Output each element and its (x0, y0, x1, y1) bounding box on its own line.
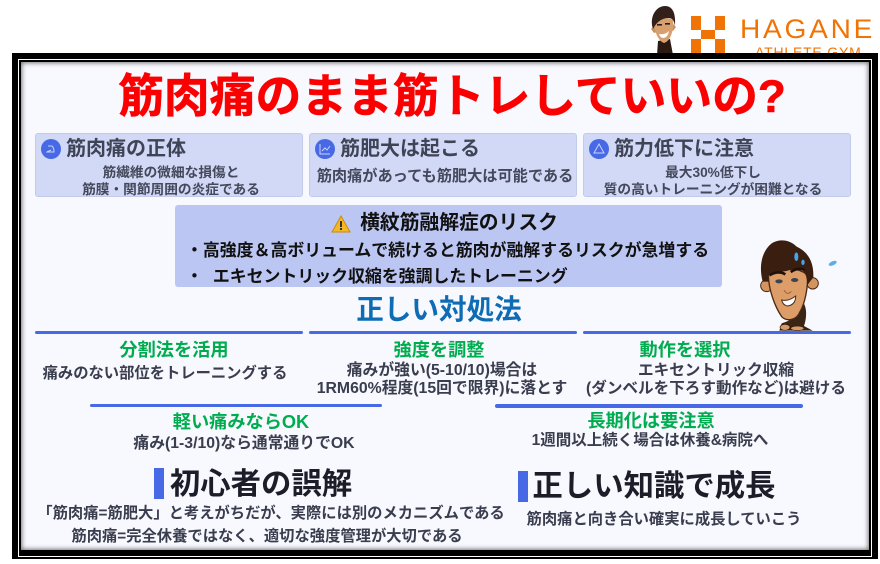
text: 1RM60%程度(15回で限界)に落とす (317, 380, 567, 397)
accent bar (518, 471, 528, 502)
heading: 正しい知識で成長 (532, 469, 776, 503)
section heading: 正しい対処法 (356, 294, 522, 325)
heading: 筋力低下に注意 (614, 138, 754, 160)
panel: 筋肉痛の正体 (35, 133, 303, 197)
text: 最大30%低下し (665, 165, 761, 180)
mascot (760, 240, 837, 331)
icon: mascot small (651, 6, 676, 53)
text (586, 362, 846, 397)
icon: chart (315, 139, 335, 159)
heading: 長期化は要注意 (587, 411, 715, 431)
text: 筋膜・関節周囲の炎症である (82, 182, 260, 197)
heading: 動作を選択 (640, 340, 730, 360)
panel: 強度 (309, 331, 577, 397)
text: 痛みのない部位をトレーニングする (43, 365, 287, 382)
heading: 筋肉痛の正体 (66, 138, 186, 160)
title: 筋肉痛のまま筋トレしていいの? (118, 71, 786, 122)
heading: 軽い痛みならOK (173, 412, 309, 432)
text (82, 165, 260, 197)
panel: 筋力低下に注意 (583, 133, 851, 197)
text: 筋繊維の微細な損傷と (103, 165, 239, 180)
text: 質の高いトレーニングが困難となる (604, 182, 822, 197)
text: 1週間以上続く場合は休養&病院へ (532, 432, 768, 449)
logo name: HAGANE (740, 14, 875, 44)
risk heading: 横紋筋融解症のリスク (360, 212, 558, 234)
rule (90, 404, 382, 407)
panel: 筋肥大は起こる (309, 133, 577, 197)
heading: 筋肥大は起こる (340, 138, 480, 160)
icon: orange H checker mark (691, 16, 725, 53)
text (604, 165, 822, 197)
panel: rhabdomyolysis risk (175, 205, 722, 287)
heading: 分割法を活用 (119, 340, 229, 360)
heading: 初心者の誤解 (170, 467, 352, 501)
logo: Hagane Athlete Gym (651, 6, 875, 60)
icon: arm (41, 139, 61, 159)
text: 「筋肉痛=筋肥大」と考えがちだが、実際には別のメカニズムである (37, 505, 505, 522)
text: エキセントリック収縮 (638, 362, 794, 379)
icon: warning (589, 139, 609, 159)
panel: 正しい知識で成長 (518, 469, 801, 528)
text (317, 361, 567, 397)
heading: 強度を調整 (394, 340, 484, 360)
text: (ダンベルを下ろす動作など)は避ける (586, 380, 846, 397)
accent bar (154, 468, 164, 499)
text: 筋肉痛と向き合い確実に成長していこう (527, 511, 801, 528)
panel: 長期化 (495, 404, 803, 449)
text: 痛みが強い(5-10/10)場合は (347, 362, 537, 379)
risk item 1: ・高強度＆高ボリュームで続けると筋肉が融解するリスクが急増する (186, 241, 709, 260)
rule (309, 331, 577, 334)
text: 痛み(1-3/10)なら通常通りでOK (133, 435, 355, 452)
logo subtitle: ATHLETE GYM (755, 44, 862, 60)
risk item 2: ・ エキセントリック収縮を強調したトレーニング (186, 267, 568, 286)
rule (583, 331, 851, 334)
text: 筋肉痛があっても筋肥大は可能である (317, 168, 573, 185)
rule (35, 331, 303, 334)
panel: 軽い痛み (90, 404, 382, 452)
icon: warning triangle (331, 215, 351, 232)
panel: 動作 (583, 331, 851, 397)
text: 筋肉痛=完全休養ではなく、適切な強度管理が大切である (71, 528, 463, 545)
rule (495, 404, 803, 408)
panel: 分割法 (35, 331, 303, 382)
panel: 初心者の誤解 (37, 467, 505, 545)
